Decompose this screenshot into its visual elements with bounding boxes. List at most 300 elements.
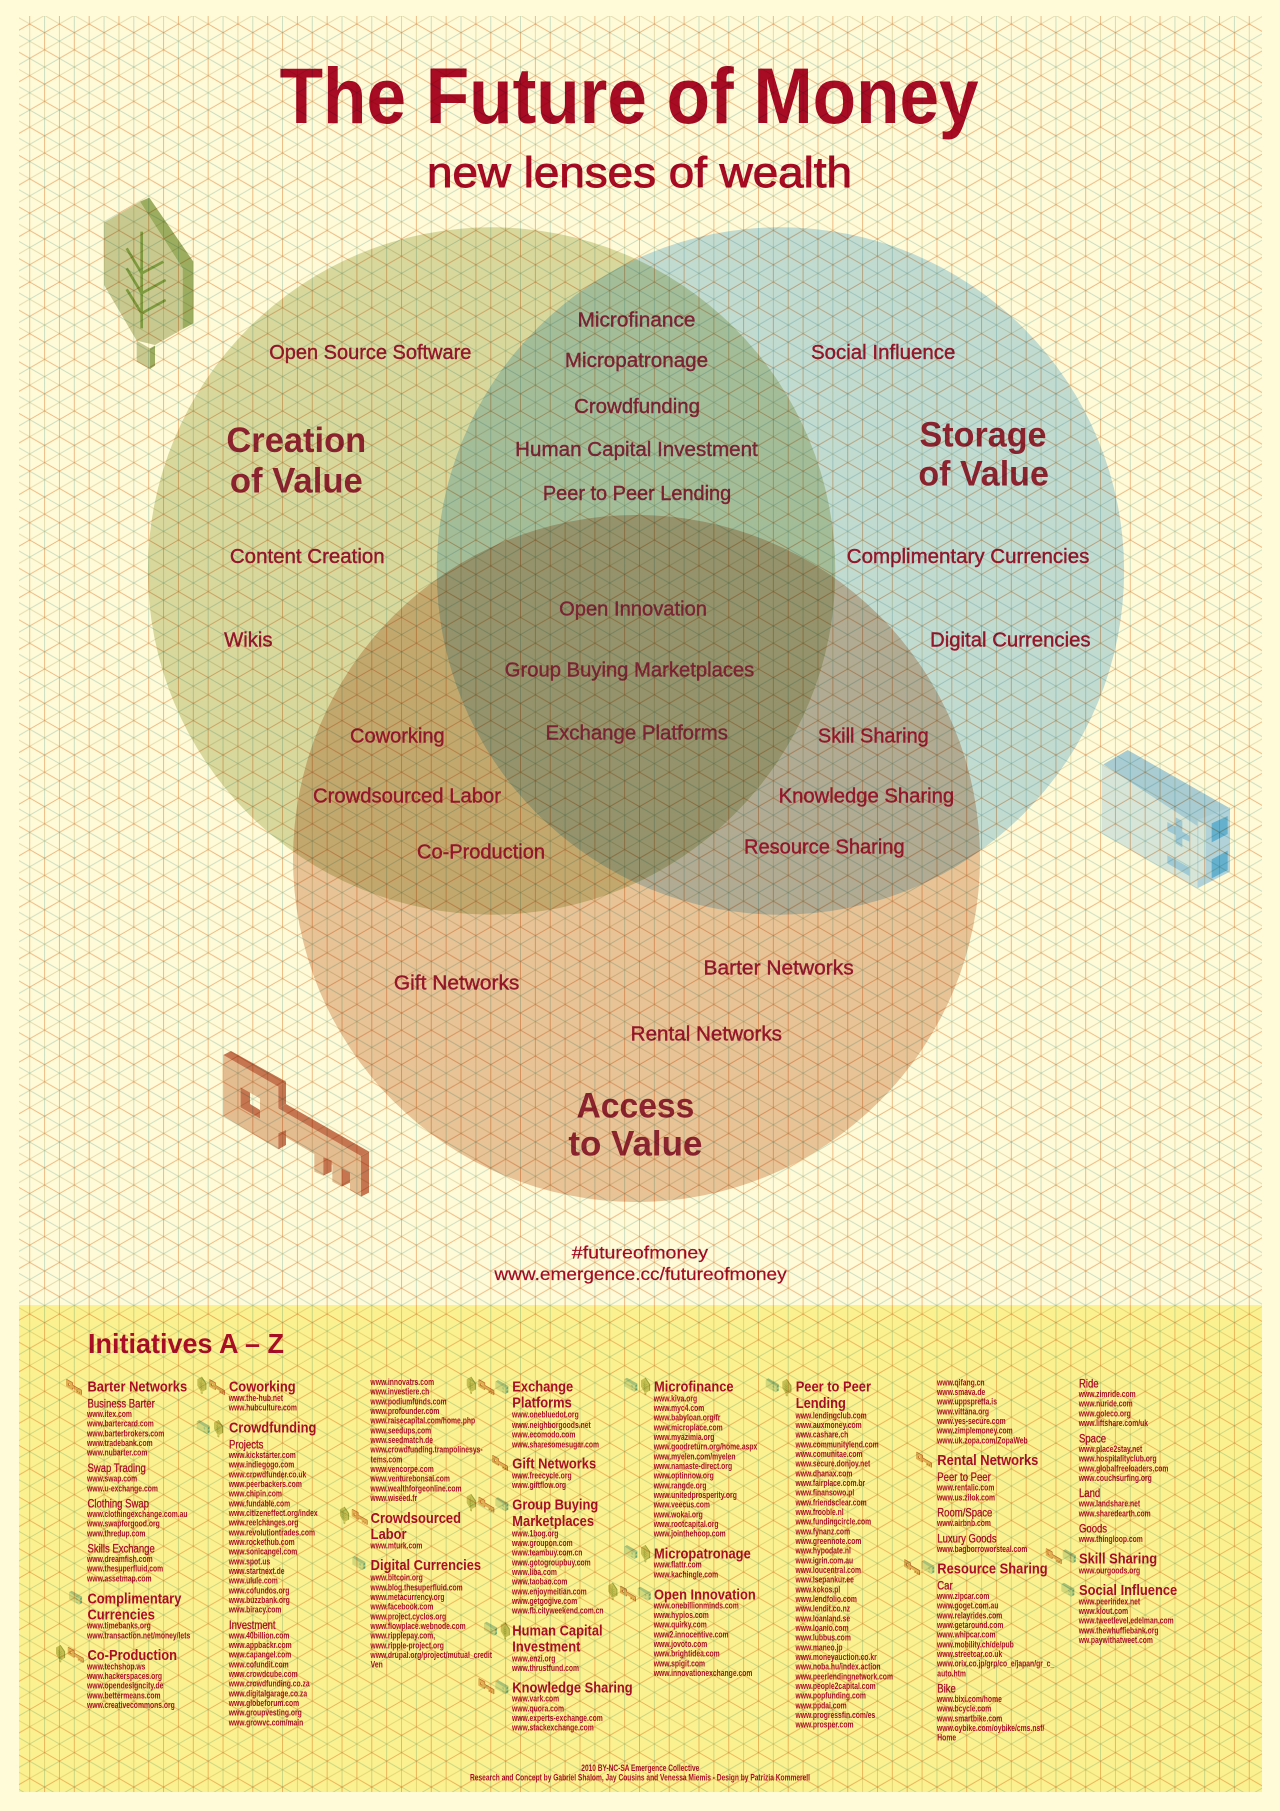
- icon: key: [223, 1051, 369, 1197]
- entry: crowdfunding: www.peerbackers.com: [228, 1479, 302, 1489]
- circle: storage of value: [437, 227, 1124, 915]
- entry: group buying marketplaces: www.liba.com: [511, 1567, 557, 1577]
- entry: open innovation: www.hypios.com: [653, 1610, 709, 1620]
- entry: crowdfunding: www.biracy.com: [228, 1605, 281, 1615]
- entry: peer to peer lending continued: [936, 1377, 1028, 1446]
- entry: crowdfunding: www.crowdfunding.co.za: [228, 1679, 310, 1689]
- label: knowledge sharing: Knowledge Sharing: [779, 784, 954, 808]
- entry: crowdfunding continued: www.investiere.ch: [370, 1387, 429, 1397]
- entry: crowdfunding: www.sonicangel.com: [228, 1547, 297, 1557]
- column 2: [197, 1377, 318, 1728]
- entry: resource sharing continued: Goods: [1079, 1523, 1107, 1536]
- entry: social influence: www.klout.com: [1078, 1606, 1128, 1616]
- entry: co-production: www.bettermeans.com: [86, 1690, 161, 1701]
- entry: crowdfunding continued: www.wiseed.fr: [370, 1493, 417, 1503]
- entry: peer to peer lending: www.lendfolio.com: [795, 1594, 857, 1604]
- entry: open innovation: www.innovationexchange.com: [653, 1668, 752, 1678]
- entry: crowdfunding: www.digitalgarage.co.za: [228, 1688, 308, 1699]
- entry: microfinance: www.rootcapital.org: [653, 1519, 719, 1529]
- entry: crowdfunding continued: www.vencorpe.com: [370, 1464, 434, 1474]
- column 7: [904, 1377, 1055, 1743]
- entry: crowdsourced labor: Labor: [371, 1526, 407, 1542]
- heading: storage of value: [918, 415, 1049, 494]
- entry: barter networks: Swap Trading: [87, 1462, 146, 1475]
- entry: microfinance: www.microplace.com: [653, 1422, 723, 1433]
- label: gift networks: Gift Networks: [394, 972, 519, 994]
- entry: resource sharing: www.smartbike.com: [936, 1713, 1002, 1724]
- entry: resource sharing continued: www.goleco.org: [1078, 1408, 1131, 1419]
- label: wikis: Wikis: [224, 628, 273, 652]
- entry: group buying marketplaces: Group Buying: [512, 1497, 598, 1513]
- entry: barter networks: www.bartercard.com: [86, 1419, 154, 1429]
- heading: access to value: to Value: [568, 1125, 702, 1164]
- entry: resource sharing: www.bcycle.com: [936, 1704, 991, 1714]
- entry: co-production: [56, 1645, 177, 1710]
- heading: access to value: Access: [576, 1086, 694, 1126]
- entry: rental networks: www.us.zilok.com: [936, 1492, 995, 1503]
- entry: open innovation: www.quirky.com: [653, 1620, 707, 1630]
- entry: exchange platforms: Exchange: [512, 1379, 574, 1395]
- footer credits: Research and Concept by Gabriel Shalom, Jay Cousins and Venessa Miemis - Design by Patrizia Kommerell: [470, 1773, 810, 1783]
- entry: crowdsourced labor: www.mturk.com: [370, 1540, 422, 1551]
- entry: social influence: [1061, 1582, 1178, 1645]
- entry: complimentary currencies: www.timebanks.org: [86, 1621, 151, 1631]
- entry: resource sharing continued: Space: [1079, 1433, 1106, 1446]
- entry: crowdfunding: www.fundable.com: [228, 1498, 290, 1509]
- entry: peer to peer lending: www.kokos.pl: [795, 1584, 840, 1595]
- heading: access to value: [568, 1086, 702, 1164]
- entry: crowdfunding: www.kickstarter.com: [228, 1450, 296, 1460]
- column 6: [766, 1378, 893, 1730]
- label: crowdfunding: Crowdfunding: [574, 395, 700, 418]
- entry: resource sharing continued: www.nuride.com: [1078, 1399, 1133, 1409]
- circle: creation of value: [148, 227, 835, 915]
- entry: co-production: www.techshop.ws: [86, 1661, 146, 1672]
- entry: gift networks: Gift Networks: [512, 1456, 597, 1472]
- entry: crowdfunding: Investment: [229, 1619, 276, 1632]
- entry: crowdfunding continued: tems.com: [371, 1454, 402, 1465]
- entry: peer to peer lending continued: www.uk.zopa.com/ZopaWeb: [936, 1435, 1028, 1446]
- entry: crowdfunding: www.appbackr.com: [228, 1640, 292, 1650]
- entry: resource sharing continued: www.globalfreeloaders.com: [1078, 1463, 1168, 1474]
- heading: creation of value: of Value: [230, 462, 363, 501]
- entry: co-production: www.creativecommons.org: [86, 1700, 175, 1710]
- entry: social influence: Social Influence: [1079, 1582, 1178, 1598]
- label: group buying marketplaces: Group Buying Marketplaces: [505, 658, 754, 682]
- entry: resource sharing: Bike: [937, 1683, 956, 1696]
- entry: crowdfunding: www.reelchanges.org: [228, 1518, 299, 1528]
- column 5: [608, 1378, 758, 1678]
- entry: barter networks: www.nubarter.com: [86, 1448, 147, 1458]
- entry: barter networks: www.assetmap.com: [86, 1573, 152, 1584]
- entry: crowdfunding continued: www.crowdfunding.trampolinesys-: [370, 1445, 483, 1455]
- label: rental networks: Rental Networks: [631, 1022, 782, 1045]
- entry: co-production: www.hackerspaces.org: [86, 1671, 162, 1681]
- label: skill sharing: Skill Sharing: [818, 724, 929, 747]
- entry: microfinance: www.namaste-direct.org: [653, 1461, 732, 1471]
- heading: initiatives a-z: Initiatives A – Z: [88, 1328, 284, 1359]
- entry: peer to peer lending: www.communitylend.com: [795, 1439, 879, 1450]
- entry: resource sharing: Resource Sharing: [937, 1561, 1048, 1577]
- title: The Future of Money: [280, 51, 979, 140]
- entry: microfinance: www.myc4.com: [653, 1403, 704, 1413]
- entry: crowdfunding: www.crowdcube.com: [228, 1669, 298, 1679]
- entry: digital currencies: www.facebook.com: [370, 1602, 433, 1612]
- entry: peer to peer lending continued: www.qifang.cn: [936, 1377, 985, 1388]
- entry: crowdsourced labor: [340, 1507, 461, 1551]
- entry: resource sharing: Car: [937, 1580, 953, 1593]
- entry: microfinance: [624, 1378, 758, 1539]
- entry: crowdsourced labor: Crowdsourced: [371, 1510, 461, 1526]
- entry: rental networks: Luxury Goods: [937, 1533, 997, 1546]
- entry: complimentary currencies: Complimentary: [87, 1591, 182, 1606]
- entry: digital currencies: www.metacurrency.org: [370, 1592, 445, 1602]
- entry: peer to peer lending: www.lendingclub.com: [795, 1410, 867, 1421]
- label: peer to peer lending: Peer to Peer Lending: [543, 482, 731, 505]
- entry: resource sharing: www.relayrides.com: [936, 1610, 1002, 1621]
- entry: digital currencies: www.blog.thesuperfluid.com: [370, 1582, 463, 1593]
- entry: group buying marketplaces: Marketplaces: [512, 1513, 594, 1529]
- entry: crowdfunding: www.groupvesting.org: [228, 1708, 302, 1718]
- entry: peer to peer lending: www.fundingcircle.com: [795, 1517, 871, 1527]
- entry: crowdfunding continued: www.venturebonsai.com: [370, 1474, 450, 1484]
- entry: crowdfunding: www.indiegogo.com: [228, 1460, 294, 1470]
- entry: peer to peer lending: www.moneyauction.co.kr: [795, 1652, 877, 1662]
- label: open source software: Open Source Software: [269, 341, 471, 364]
- entry: crowdfunding: www.globeforum.com: [228, 1698, 299, 1708]
- entry: microfinance: www.jointhehoop.com: [653, 1529, 726, 1539]
- entry: microfinance: www.babyloan.org/fr: [653, 1413, 720, 1423]
- entry: open innovation: www.spigit.com: [653, 1658, 705, 1669]
- entry: resource sharing continued: www.sharedearth.com: [1078, 1508, 1151, 1519]
- entry: barter networks: www.u-exchange.com: [86, 1483, 158, 1494]
- label: co-production: Co-Production: [417, 840, 545, 864]
- entry: peer to peer lending: www.loucentral.com: [795, 1565, 861, 1575]
- entry: group buying marketplaces: www.teambuy.com.cn: [511, 1548, 583, 1558]
- entry: resource sharing: [904, 1559, 1055, 1743]
- entry: resource sharing: www.goget.com.au: [936, 1601, 999, 1611]
- entry: peer to peer lending: www.progressfin.com/es: [795, 1710, 876, 1720]
- entry: resource sharing continued: www.place2stay.net: [1078, 1444, 1143, 1454]
- website link: www.emergence.cc/futureofmoney: [493, 1264, 787, 1284]
- entry: peer to peer lending: www.frooble.nl: [795, 1507, 844, 1517]
- entry: open innovation: www2.innocentive.com: [653, 1629, 729, 1640]
- heading: storage of value: of Value: [918, 455, 1049, 494]
- column 4: [467, 1377, 633, 1733]
- entry: group buying marketplaces: www.taobao.com: [511, 1577, 567, 1587]
- entry: crowdfunding: Projects: [229, 1439, 263, 1452]
- footer credits: 2010 BY-NC-SA Emergence Collective: [581, 1763, 699, 1773]
- entry: peer to peer lending: www.noba.hu/index.action: [795, 1662, 881, 1672]
- entry: peer to peer lending: www.maneo.jp: [795, 1642, 843, 1653]
- entry: peer to peer lending: www.loanland.se: [795, 1613, 851, 1624]
- entry: microfinance: www.rangde.org: [653, 1480, 707, 1491]
- entry: group buying marketplaces: www.groupon.com: [511, 1538, 573, 1548]
- entry: crowdfunding: www.chipin.com: [228, 1489, 282, 1499]
- entry: resource sharing: www.streetcar.co.uk: [936, 1649, 1003, 1659]
- entry: digital currencies: www.flowplace.webnode.com: [370, 1621, 466, 1631]
- entry: barter networks: www.barterbrokers.com: [86, 1428, 164, 1439]
- entry: crowdfunding: www.cofundit.com: [228, 1659, 289, 1670]
- label: social influence: Social Influence: [811, 341, 955, 364]
- entry: crowdfunding continued: www.seedups.com: [370, 1425, 431, 1436]
- entry: microfinance: www.wokai.org: [653, 1509, 703, 1520]
- label: open innovation: Open Innovation: [559, 597, 707, 620]
- entry: resource sharing: www.oybike.com/oybike/cms.nsf/: [936, 1723, 1045, 1733]
- entry: microfinance: Microfinance: [654, 1379, 734, 1395]
- entry: resource sharing continued: www.hospitalityclub.org: [1078, 1454, 1157, 1464]
- entry: knowledge sharing: [478, 1678, 633, 1733]
- entry: peer to peer lending: www.peerlendingnetwork.com: [795, 1671, 893, 1682]
- entry: human capital investment: Human Capital: [512, 1623, 603, 1638]
- entry: peer to peer lending: www.dhanax.com: [795, 1468, 852, 1479]
- entry: peer to peer lending: www.people2capital.com: [795, 1681, 876, 1691]
- entry: coworking: www.the-hub.net: [228, 1393, 283, 1403]
- entry: knowledge sharing: www.quora.com: [511, 1703, 564, 1714]
- entry: exchange platforms: [467, 1377, 599, 1450]
- entry: exchange platforms: Platforms: [512, 1395, 572, 1411]
- entry: peer to peer lending continued: www.yes-secure.com: [936, 1416, 1006, 1426]
- entry: rental networks: Rental Networks: [937, 1452, 1039, 1468]
- label: digital currencies: Digital Currencies: [930, 628, 1091, 652]
- entry: microfinance: www.optinnow.org: [653, 1471, 714, 1481]
- entry: crowdfunding continued: www.raisecapital.com/home.php: [370, 1416, 475, 1426]
- entry: gift networks: www.freecycle.org: [511, 1470, 572, 1481]
- entry: group buying marketplaces: www.gotogroupbuy.com: [511, 1557, 591, 1568]
- entry: resource sharing: www.mobility.ch/de/pub: [936, 1639, 1014, 1650]
- entry: peer to peer lending continued: www.zimplemoney.com: [936, 1426, 1013, 1436]
- entry: digital currencies: Digital Currencies: [371, 1557, 481, 1573]
- entry: resource sharing: www.bixi.com/home: [936, 1694, 1002, 1704]
- column 3: [340, 1377, 492, 1670]
- entry: knowledge sharing: www.stackexchange.com: [511, 1723, 594, 1733]
- entry: peer to peer lending: www.finansowo.pl: [795, 1488, 854, 1498]
- heading: creation of value: Creation: [226, 421, 366, 460]
- entry: resource sharing: www.orix.co.jp/grp/co_e/japan/gr_c_: [936, 1659, 1055, 1669]
- label: micropatronage: Micropatronage: [565, 349, 708, 372]
- entry: human capital investment: www.enzi.org: [511, 1653, 556, 1664]
- entry: human capital investment: [484, 1622, 603, 1673]
- entry: resource sharing continued: Ride: [1079, 1378, 1099, 1391]
- entry: crowdfunding continued: [370, 1377, 483, 1503]
- label: complimentary currencies: Complimentary Currencies: [847, 545, 1089, 568]
- entry: peer to peer lending: www.loanio.com: [795, 1623, 849, 1633]
- entry: resource sharing: www.getaround.com: [936, 1620, 1003, 1630]
- entry: group buying marketplaces: www.1bog.org: [511, 1528, 559, 1539]
- entry: crowdfunding continued: www.profounder.com: [370, 1406, 439, 1416]
- hashtag: #futureofmoney: [572, 1242, 708, 1262]
- entry: digital currencies: [352, 1556, 492, 1670]
- entry: exchange platforms: www.onebluedot.org: [511, 1409, 579, 1420]
- entry: crowdfunding continued: www.innovatrs.com: [370, 1377, 434, 1387]
- entry: crowdfunding continued: www.seedmatch.de: [370, 1435, 434, 1445]
- entry: crowdfunding: www.revolutiontrades.com: [228, 1527, 315, 1538]
- entry: peer to peer lending: www.prosper.com: [795, 1720, 854, 1730]
- entry: barter networks: Skills Exchange: [87, 1543, 155, 1556]
- entry: resource sharing continued: Land: [1079, 1487, 1100, 1500]
- label: microfinance: Microfinance: [578, 308, 695, 332]
- entry: peer to peer lending: www.hypodate.nl: [795, 1546, 851, 1556]
- label: content creation: Content Creation: [230, 545, 385, 568]
- entry: co-production: Co-Production: [87, 1647, 177, 1663]
- entry: crowdfunding: www.buzzbank.org: [228, 1595, 290, 1605]
- entry: peer to peer lending continued: www.smava.de: [936, 1387, 986, 1397]
- entry: barter networks: www.thredup.com: [86, 1528, 145, 1539]
- entry: barter networks: www.itex.com: [86, 1409, 132, 1419]
- entry: barter networks: www.clothingexchange.com.au: [86, 1509, 188, 1519]
- entry: resource sharing continued: www.landshare.net: [1078, 1499, 1141, 1509]
- entry: social influence: ww.paywithatweet.com: [1078, 1635, 1153, 1645]
- entry: human capital investment: Investment: [512, 1639, 581, 1655]
- entry: peer to peer lending: Peer to Peer: [796, 1379, 872, 1395]
- column 1: [56, 1379, 191, 1710]
- subtitle: new lenses of wealth: [427, 149, 852, 197]
- entry: rental networks: Room/Space: [937, 1507, 992, 1520]
- entry: digital currencies: Ven: [371, 1660, 383, 1670]
- label: resource sharing: Resource Sharing: [744, 835, 905, 858]
- entry: resource sharing continued: www.thingloop.com: [1078, 1534, 1143, 1544]
- entry: microfinance: www.myelen.com/myelen: [653, 1451, 736, 1462]
- entry: human capital investment: www.thrustfund.com: [511, 1663, 579, 1673]
- entry: barter networks: Barter Networks: [87, 1379, 187, 1394]
- footer credits: [470, 1763, 810, 1783]
- entry: group buying marketplaces: www.getgogive.com: [511, 1596, 577, 1606]
- entry: peer to peer lending: www.lsepankur.ee: [795, 1575, 854, 1585]
- entry: crowdfunding: www.capangel.com: [228, 1650, 291, 1660]
- entry: group buying marketplaces: www.enjoymeitian.com: [511, 1586, 587, 1597]
- entry: barter networks: Business Barter: [87, 1398, 155, 1411]
- label: exchange platforms: Exchange Platforms: [546, 722, 728, 744]
- entry: complimentary currencies: www.transaction.net/money/lets: [86, 1630, 191, 1641]
- entry: peer to peer lending: www.ppdai.com: [795, 1700, 847, 1711]
- entry: knowledge sharing: Knowledge Sharing: [512, 1680, 633, 1696]
- entry: rental networks: www.rentalic.com: [936, 1483, 994, 1493]
- entry: open innovation: www.onebillionminds.com: [653, 1600, 739, 1611]
- entry: digital currencies: www.ripple-project.org: [370, 1640, 444, 1651]
- entry: skill sharing: www.ourgoods.org: [1078, 1565, 1140, 1576]
- entry: crowdfunding: www.cofundos.org: [228, 1585, 290, 1596]
- entry: digital currencies: www.bitcoin.org: [370, 1573, 423, 1583]
- entry: crowdfunding: www.citizeneffect.org/index: [228, 1508, 318, 1518]
- label: coworking: Coworking: [350, 724, 445, 747]
- entry: resource sharing continued: www.zimride.com: [1078, 1389, 1136, 1399]
- entry: knowledge sharing: www.vark.com: [511, 1694, 559, 1704]
- entry: peer to peer lending: www.comunitae.com: [795, 1449, 863, 1459]
- entry: crowdfunding: [197, 1420, 318, 1728]
- entry: digital currencies: www.project.cyclos.org: [370, 1611, 446, 1622]
- icon: bank building: [1102, 750, 1230, 888]
- entry: resource sharing: auto.htm: [937, 1668, 966, 1679]
- entry: peer to peer lending: www.auxmoney.com: [795, 1420, 862, 1430]
- entry: peer to peer lending: www.cashare.ch: [795, 1430, 848, 1440]
- panel: initiatives background: [19, 1305, 1262, 1792]
- entry: micropatronage: Micropatronage: [654, 1546, 751, 1561]
- entry: rental networks: www.bagborroworsteal.com: [936, 1544, 1027, 1554]
- entry: crowdfunding: www.40billion.com: [228, 1630, 289, 1641]
- entry: resource sharing: Home: [937, 1733, 957, 1743]
- entry: resource sharing continued: www.liftshare.com/uk: [1078, 1418, 1149, 1428]
- entry: barter networks: [66, 1379, 188, 1584]
- entry: peer to peer lending: www.greennote.com: [795, 1536, 861, 1546]
- entry: resource sharing continued: [1078, 1378, 1168, 1544]
- circle: access to value: [293, 515, 980, 1202]
- entry: complimentary currencies: [69, 1591, 191, 1641]
- entry: crowdfunding: www.growvc.com/main: [228, 1717, 304, 1728]
- entry: peer to peer lending continued: www.vittana.org: [936, 1406, 989, 1417]
- entry: crowdfunding: www.spot.us: [228, 1556, 271, 1567]
- entry: gift networks: [492, 1455, 597, 1490]
- entry: barter networks: www.swap.com: [86, 1474, 137, 1484]
- entry: peer to peer lending: www.popfunding.com: [795, 1691, 866, 1701]
- entry: peer to peer lending: www.igrin.com.au: [795, 1555, 853, 1566]
- entry: peer to peer lending: www.secure.donjoy.net: [795, 1459, 871, 1469]
- entry: group buying marketplaces: [467, 1494, 604, 1616]
- entry: rental networks: Peer to Peer: [937, 1471, 991, 1484]
- entry: digital currencies: www.drupal.org/project/mutual_credit: [370, 1650, 492, 1660]
- entry: open innovation: www.jovoto.com: [653, 1639, 707, 1649]
- entry: barter networks: www.thesuperfluid.com: [86, 1564, 163, 1574]
- entry: crowdfunding continued: www.podiumfunds.com: [370, 1396, 447, 1407]
- entry: knowledge sharing: www.experts-exchange.com: [511, 1713, 603, 1723]
- entry: barter networks: www.dreamfish.com: [86, 1554, 153, 1564]
- entry: crowdfunding: www.rockethub.com: [228, 1537, 295, 1547]
- entry: group buying marketplaces: www.fb.cityweekend.com.cn: [511, 1606, 604, 1616]
- icon: leaf: [104, 198, 193, 369]
- entry: crowdfunding continued: www.wealthforgeonline.com: [370, 1483, 462, 1494]
- entry: resource sharing: www.zipcar.com: [936, 1591, 989, 1601]
- entry: peer to peer lending: www.lendit.co.nz: [795, 1604, 850, 1614]
- entry: barter networks: Clothing Swap: [87, 1498, 149, 1511]
- entry: exchange platforms: www.sharesomesugar.com: [511, 1439, 599, 1450]
- entry: rental networks: www.airbnb.com: [936, 1518, 991, 1528]
- entry: crowdfunding: www.crowdfunder.co.uk: [228, 1469, 307, 1480]
- entry: microfinance: www.goodreturn.org/home.aspx: [653, 1442, 758, 1452]
- entry: microfinance: www.unitedprosperity.org: [653, 1490, 737, 1500]
- entry: barter networks: www.tradebank.com: [86, 1438, 153, 1448]
- label: barter networks: Barter Networks: [704, 956, 854, 980]
- entry: coworking: www.hubculture.com: [228, 1403, 297, 1413]
- entry: peer to peer lending: Lending: [796, 1395, 846, 1411]
- label: human capital investment: Human Capital Investment: [515, 438, 758, 461]
- entry: rental networks: [916, 1452, 1039, 1554]
- entry: open innovation: [608, 1583, 756, 1678]
- entry: co-production: www.opendesigncity.de: [86, 1681, 164, 1691]
- venn labels: [224, 308, 1091, 1164]
- entry: open innovation: www.brightidea.com: [653, 1649, 720, 1659]
- entry: peer to peer lending: [766, 1378, 893, 1730]
- entry: digital currencies: www.ripplepay.com,: [370, 1631, 435, 1641]
- venn diagram: [148, 227, 1124, 1202]
- entry: coworking: Coworking: [229, 1379, 296, 1394]
- entry: skill sharing: [1046, 1548, 1157, 1576]
- heading: storage of value: Storage: [920, 415, 1046, 454]
- entry: social influence: www.peerindex.net: [1078, 1596, 1141, 1607]
- entry: micropatronage: [624, 1545, 751, 1580]
- entry: peer to peer lending continued: www.uppspretta.is: [936, 1397, 998, 1407]
- entry: coworking: [197, 1377, 297, 1413]
- entry: microfinance: www.veecus.com: [653, 1500, 710, 1510]
- entry: peer to peer lending: www.friendsclear.com: [795, 1497, 867, 1508]
- entry: microfinance: www.kiva.org: [653, 1393, 697, 1404]
- entry: peer to peer lending: www.fynanz.com: [795, 1526, 850, 1537]
- entry: crowdfunding: www.ulule.com: [228, 1576, 278, 1586]
- entry: exchange platforms: www.ecomodo.com: [511, 1430, 575, 1440]
- entry: barter networks: www.swapforgood.org: [86, 1519, 160, 1529]
- entry: peer to peer lending: www.lubbus.com: [795, 1633, 851, 1643]
- entry: peer to peer lending: www.fairplace.com.br: [795, 1478, 865, 1488]
- entry: crowdfunding: Crowdfunding: [229, 1420, 316, 1435]
- entry: social influence: www.tweetlevel.edelman.com: [1078, 1616, 1174, 1626]
